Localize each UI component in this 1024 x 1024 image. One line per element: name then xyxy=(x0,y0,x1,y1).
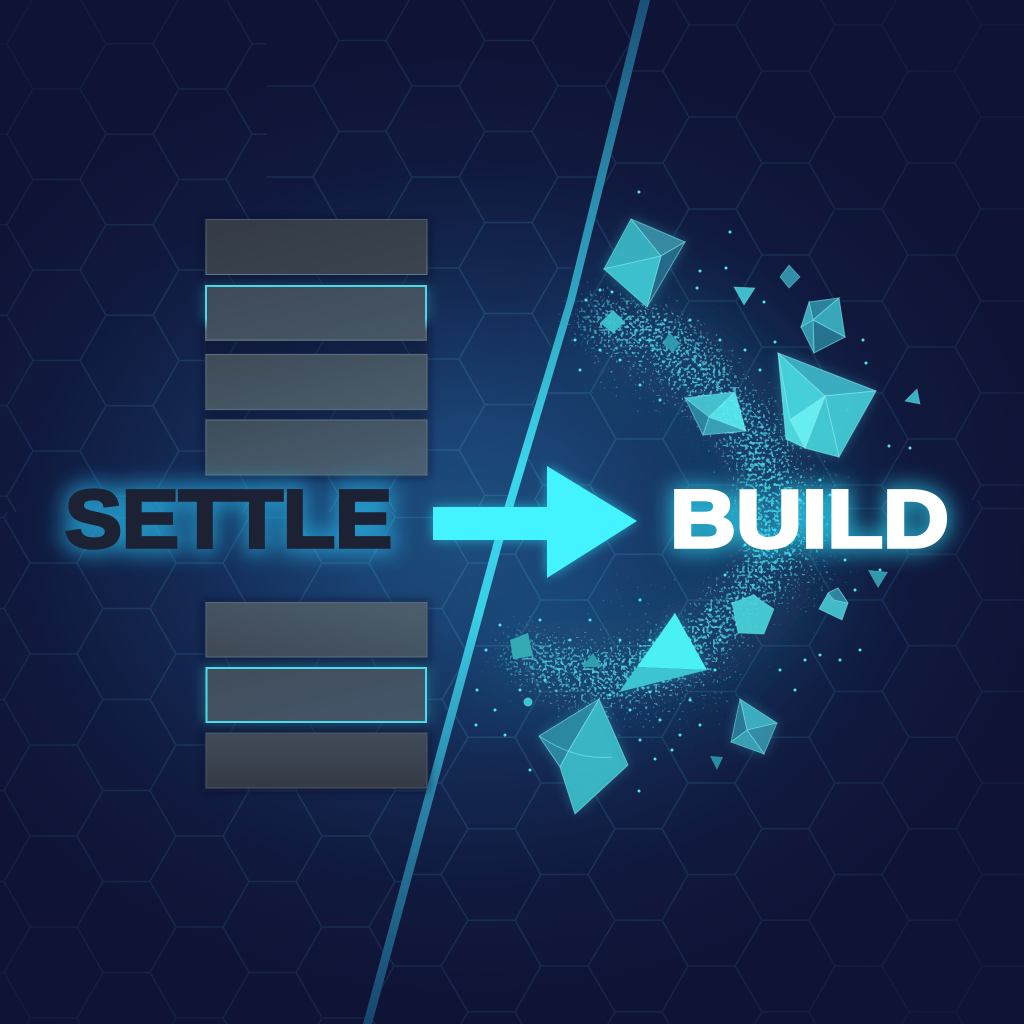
crystal: large center xyxy=(778,353,876,457)
dot shard xyxy=(524,698,532,706)
arrow xyxy=(433,466,637,578)
bar 7 xyxy=(206,733,427,788)
crystal: bottom large xyxy=(539,699,628,814)
bar 2 highlighted xyxy=(206,286,426,340)
diagonal divider line xyxy=(363,0,650,1024)
shard: faint small triangle xyxy=(582,653,602,667)
BUILD glow: BUILD xyxy=(670,474,949,565)
heading: SETTLE: SETTLE xyxy=(65,474,392,565)
arrow glow xyxy=(433,466,637,578)
shard: faint left blob xyxy=(510,633,533,659)
crystal: center left xyxy=(685,392,746,435)
bar 1 xyxy=(206,220,427,274)
particle field glow xyxy=(510,330,775,668)
small triangle right xyxy=(868,570,888,588)
crystal: upper left xyxy=(604,219,685,307)
small crystal shards upper xyxy=(600,265,920,404)
crystal: lower pentagon xyxy=(732,595,774,634)
crystal: main triangle xyxy=(619,613,707,692)
bar 6 glow xyxy=(203,665,430,724)
bar 6 highlighted xyxy=(206,668,426,722)
heading: BUILD: BUILD xyxy=(670,474,949,565)
SETTLE glow: SETTLE xyxy=(65,474,392,565)
bar shadows xyxy=(203,218,430,792)
panel: settle stacked bars xyxy=(203,218,430,792)
bar 2 glow xyxy=(203,285,430,321)
scattered larger particles xyxy=(476,192,910,791)
crystal: lower right xyxy=(731,699,777,754)
crystal: upper right pentagon xyxy=(801,298,845,353)
particle cloud second layer xyxy=(500,319,825,717)
particle cloud xyxy=(500,319,825,717)
crystal: right lower xyxy=(819,588,848,620)
bar 4 xyxy=(206,420,427,475)
crystal glow xyxy=(539,219,876,814)
bar 3 xyxy=(206,354,427,410)
bar 5 xyxy=(206,602,427,657)
small triangle bottom xyxy=(710,756,723,770)
